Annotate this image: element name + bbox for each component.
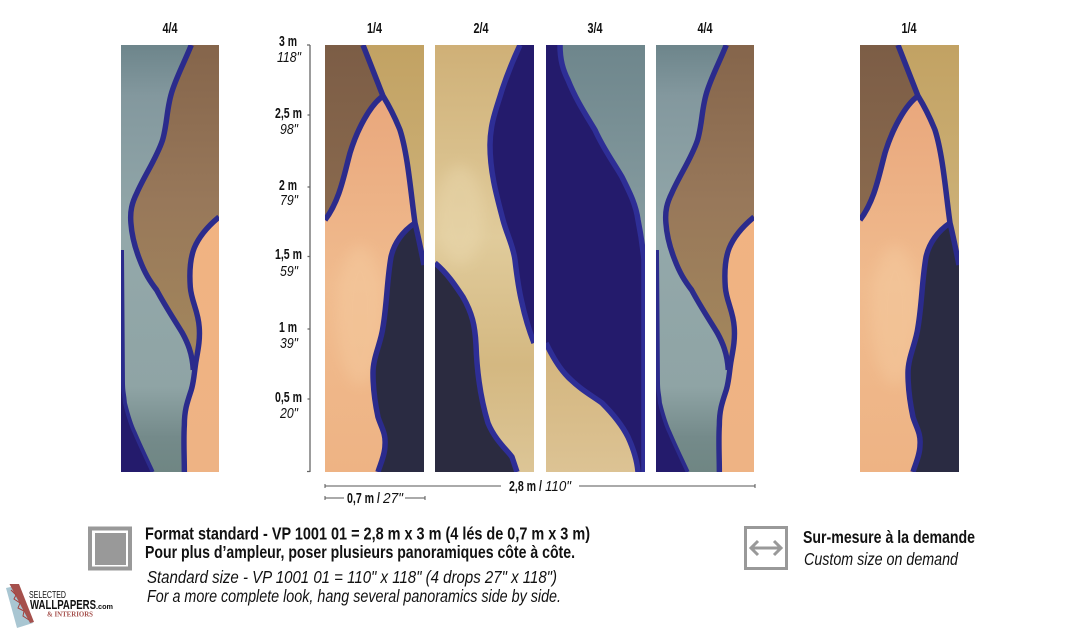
drop width dimension xyxy=(325,491,425,507)
logo: & INTERIORS xyxy=(47,610,93,618)
logo: SELECTED xyxy=(29,590,66,601)
height scale: 3 m xyxy=(279,34,297,50)
panel headings: 1/4 xyxy=(367,21,382,37)
icon: custom size arrows xyxy=(746,528,786,568)
height scale: 98" xyxy=(280,122,299,138)
panel headings: 4/4 xyxy=(698,21,712,37)
drop width dimension: 0,7 m / xyxy=(347,491,380,507)
custom size text xyxy=(803,527,975,569)
panel: right 1/4 repeat xyxy=(860,45,959,472)
total width dimension: 110" xyxy=(545,479,572,495)
icon: standard format xyxy=(90,528,130,568)
height scale xyxy=(275,34,310,472)
standard format text: Format standard - VP 1001 01 = 2,8 m x 3 m (4 lés de 0,7 m x 3 m) xyxy=(145,524,590,544)
custom size text: Custom size on demand xyxy=(804,549,959,569)
panel: 2/4 xyxy=(435,45,534,472)
height scale: 118" xyxy=(277,50,302,66)
height scale: 20" xyxy=(279,406,299,422)
height scale: 1 m xyxy=(279,320,297,336)
panel: 3/4 xyxy=(546,45,645,472)
standard format text: Standard size - VP 1001 01 = 110" x 118" (4 drops 27" x 118") xyxy=(147,567,557,587)
standard format text: For a more complete look, hang several panoramics side by side. xyxy=(147,586,561,606)
height scale: 2 m xyxy=(279,178,297,194)
standard format text: Pour plus d’ampleur, poser plusieurs panoramiques côte à côte. xyxy=(145,542,575,562)
total width dimension xyxy=(325,479,755,495)
total width dimension: 2,8 m / xyxy=(509,479,542,495)
drop width dimension: 27" xyxy=(382,491,404,507)
panel headings xyxy=(162,21,916,37)
logo xyxy=(6,584,113,628)
logo: .com xyxy=(96,604,113,611)
panel: left 4/4 repeat xyxy=(121,45,219,472)
panel headings: 2/4 xyxy=(474,21,488,37)
logo: WALLPAPERS xyxy=(30,597,96,612)
height scale: 39" xyxy=(280,336,299,352)
panel: 1/4 xyxy=(325,45,424,472)
height scale: 0,5 m xyxy=(275,390,302,406)
panel: 4/4 xyxy=(656,45,754,472)
custom size text: Sur-mesure à la demande xyxy=(803,527,975,547)
height scale: 59" xyxy=(280,264,299,280)
panel headings: 4/4 xyxy=(162,21,178,37)
panel headings: 3/4 xyxy=(588,21,602,37)
panel headings: 1/4 xyxy=(902,21,916,37)
height scale: 1,5 m xyxy=(275,247,302,263)
height scale: 79" xyxy=(280,193,299,209)
standard format text xyxy=(145,524,590,606)
height scale: 2,5 m xyxy=(275,106,302,122)
